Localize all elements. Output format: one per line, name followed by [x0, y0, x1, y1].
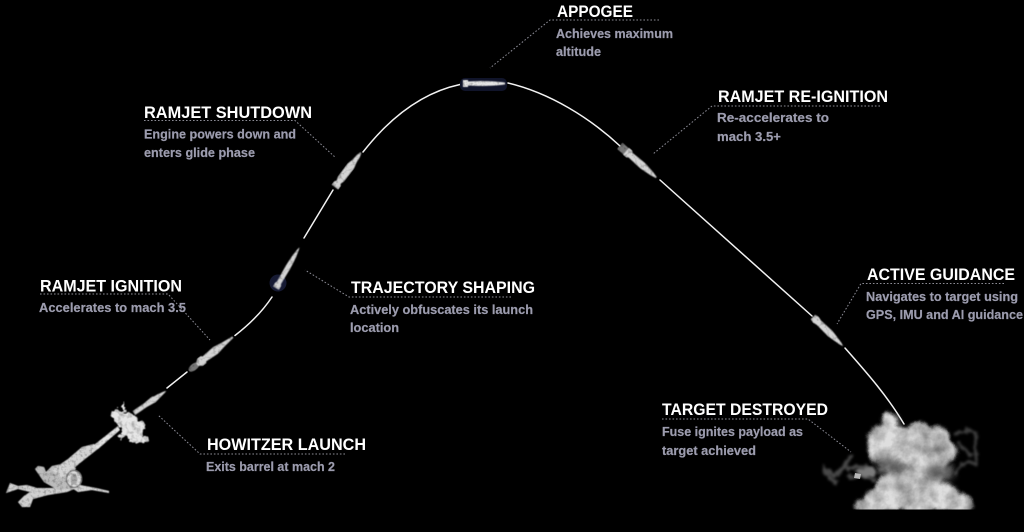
howitzer barrel	[94, 426, 120, 449]
leader line	[653, 106, 880, 154]
debris highlight	[854, 473, 861, 479]
heading: TARGET DESTROYED	[662, 401, 828, 419]
heading: RAMJET SHUTDOWN	[144, 104, 312, 122]
description: Re-accelerates to	[717, 111, 829, 125]
description: Engine powers down and	[144, 128, 296, 142]
description: location	[350, 321, 399, 335]
dark halo	[270, 274, 286, 292]
rocket: ramjet shutdown	[332, 150, 364, 189]
description: Achieves maximum	[556, 27, 673, 41]
howitzer right trail	[72, 485, 109, 493]
leader line	[158, 415, 345, 454]
description: Exits barrel at mach 2	[206, 460, 335, 474]
leader line	[837, 284, 1004, 324]
leader line	[40, 294, 210, 340]
leader line	[662, 419, 851, 452]
description: Navigates to target using	[866, 290, 1018, 304]
trajectory line	[167, 83, 904, 424]
icon: howitzer	[6, 426, 120, 507]
description: altitude	[556, 45, 601, 59]
heading: TRAJECTORY SHAPING	[351, 279, 535, 297]
heading: ACTIVE GUIDANCE	[867, 266, 1015, 284]
rocket: ramjet re-ignition	[617, 143, 659, 181]
dark halo	[460, 78, 507, 91]
label: trajectory shaping	[305, 270, 535, 335]
heading: HOWITZER LAUNCH	[207, 436, 366, 454]
label: ramjet shutdown	[144, 104, 336, 160]
icon: explosion cloud	[825, 412, 977, 515]
label: ramjet ignition	[39, 278, 210, 340]
howitzer wheel hub	[70, 474, 78, 484]
description: Accelerates to mach 3.5	[39, 301, 186, 315]
label: ramjet re-ignition	[653, 88, 888, 154]
description: target achieved	[662, 444, 756, 458]
heading: APPOGEE	[557, 3, 633, 21]
smoke wisps left	[825, 456, 876, 484]
description: Fuse ignites payload as	[662, 425, 803, 439]
heading: RAMJET IGNITION	[40, 278, 182, 296]
rocket: active guidance	[810, 314, 846, 349]
rocket: launch	[132, 388, 168, 416]
label: target destroyed	[662, 401, 851, 458]
cloud shadows	[876, 446, 952, 491]
leader line	[305, 270, 511, 297]
description: enters glide phase	[144, 146, 255, 160]
howitzer recoil tube	[52, 444, 99, 478]
description: GPS, IMU and AI guidance	[866, 308, 1023, 322]
howitzer left trail	[6, 483, 74, 507]
howitzer wheel	[66, 470, 82, 488]
smoke wisps right	[955, 431, 977, 476]
heading: RAMJET RE-IGNITION	[718, 88, 888, 106]
description: mach 3.5+	[717, 130, 781, 144]
smoke cloud main	[855, 412, 971, 515]
icon: muzzle blast	[110, 402, 149, 443]
leader line	[490, 20, 659, 68]
label: howitzer launch	[158, 415, 366, 474]
rocket: ramjet ignition	[186, 334, 236, 374]
label: appogee	[490, 3, 673, 68]
label: active guidance	[837, 266, 1023, 324]
debris smoke left	[856, 467, 876, 477]
description: Actively obfuscates its launch	[350, 303, 533, 317]
rocket: appogee	[460, 78, 507, 91]
leader line	[144, 120, 336, 158]
howitzer carriage	[35, 464, 76, 490]
rocket: trajectory shaping	[270, 246, 302, 292]
